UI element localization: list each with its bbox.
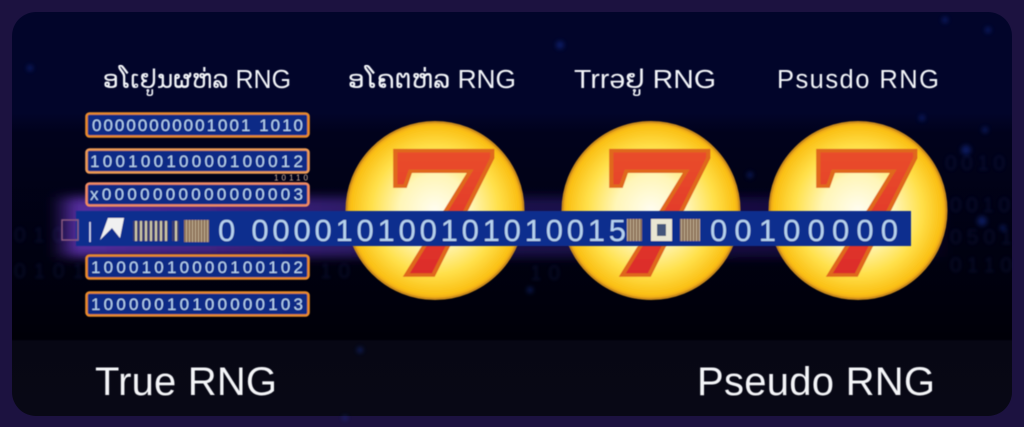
band left garbled blocks (133, 220, 209, 242)
binary row 3: x0000000000000003 (90, 185, 303, 204)
slot coin 3 (770, 106, 946, 316)
faint background binary digits: 0 5 0 1 (950, 226, 1012, 249)
seven glyph: 7 (382, 106, 498, 316)
horizontal binary band (62, 211, 911, 248)
band binary digits right: 00100000 (710, 213, 898, 248)
faint background binary digits: 1 0 (530, 262, 560, 285)
binary row 2: 10010010000100012 (90, 152, 303, 171)
binary row 5: 10000010100000103 (91, 295, 303, 314)
slot coin 1 (346, 106, 524, 316)
faint background binary digits: 0 0 1 0 (950, 194, 1010, 217)
slot coin 2 (562, 106, 740, 316)
heading: column 2: ອໂຄຕຫ່ລ RNG (348, 66, 516, 94)
faint background binary digits: 0 1 0 1 (14, 260, 84, 283)
faint background binary digits: 0 1 0 (14, 224, 64, 247)
faint background binary digits (14, 152, 1012, 285)
faint background binary digits: 1 0 (320, 260, 350, 283)
heading: column 1: ອໂເຢູນຜຫ່ລ RNG (103, 66, 291, 96)
band right garbled blocks (627, 219, 700, 241)
label: Pseudo RNG: Pseudo RNG (697, 360, 935, 404)
purple glow behind the band (50, 197, 950, 257)
binary rows stack (86, 114, 309, 316)
faint background binary digits: 0 1 1 0 (950, 254, 1012, 277)
binary row 1: 00000000001001 1010 (92, 116, 303, 135)
band binary digits: 0 000010100101010015 (218, 213, 626, 248)
small binary fragment: 10110 (274, 174, 309, 182)
heading: Psusdo RNG: Psusdo RNG (777, 66, 939, 94)
band left icon (62, 218, 124, 242)
heading: column 3: Trrəຢູ RNG (574, 66, 716, 96)
faint background binary digits: 0 0 1 0 (945, 152, 1005, 175)
label: True RNG: True RNG (95, 360, 277, 404)
binary row 4: 10001010000100102 (91, 258, 303, 277)
seven glyph: 7 (598, 106, 714, 316)
seven glyph: 7 (805, 106, 921, 316)
